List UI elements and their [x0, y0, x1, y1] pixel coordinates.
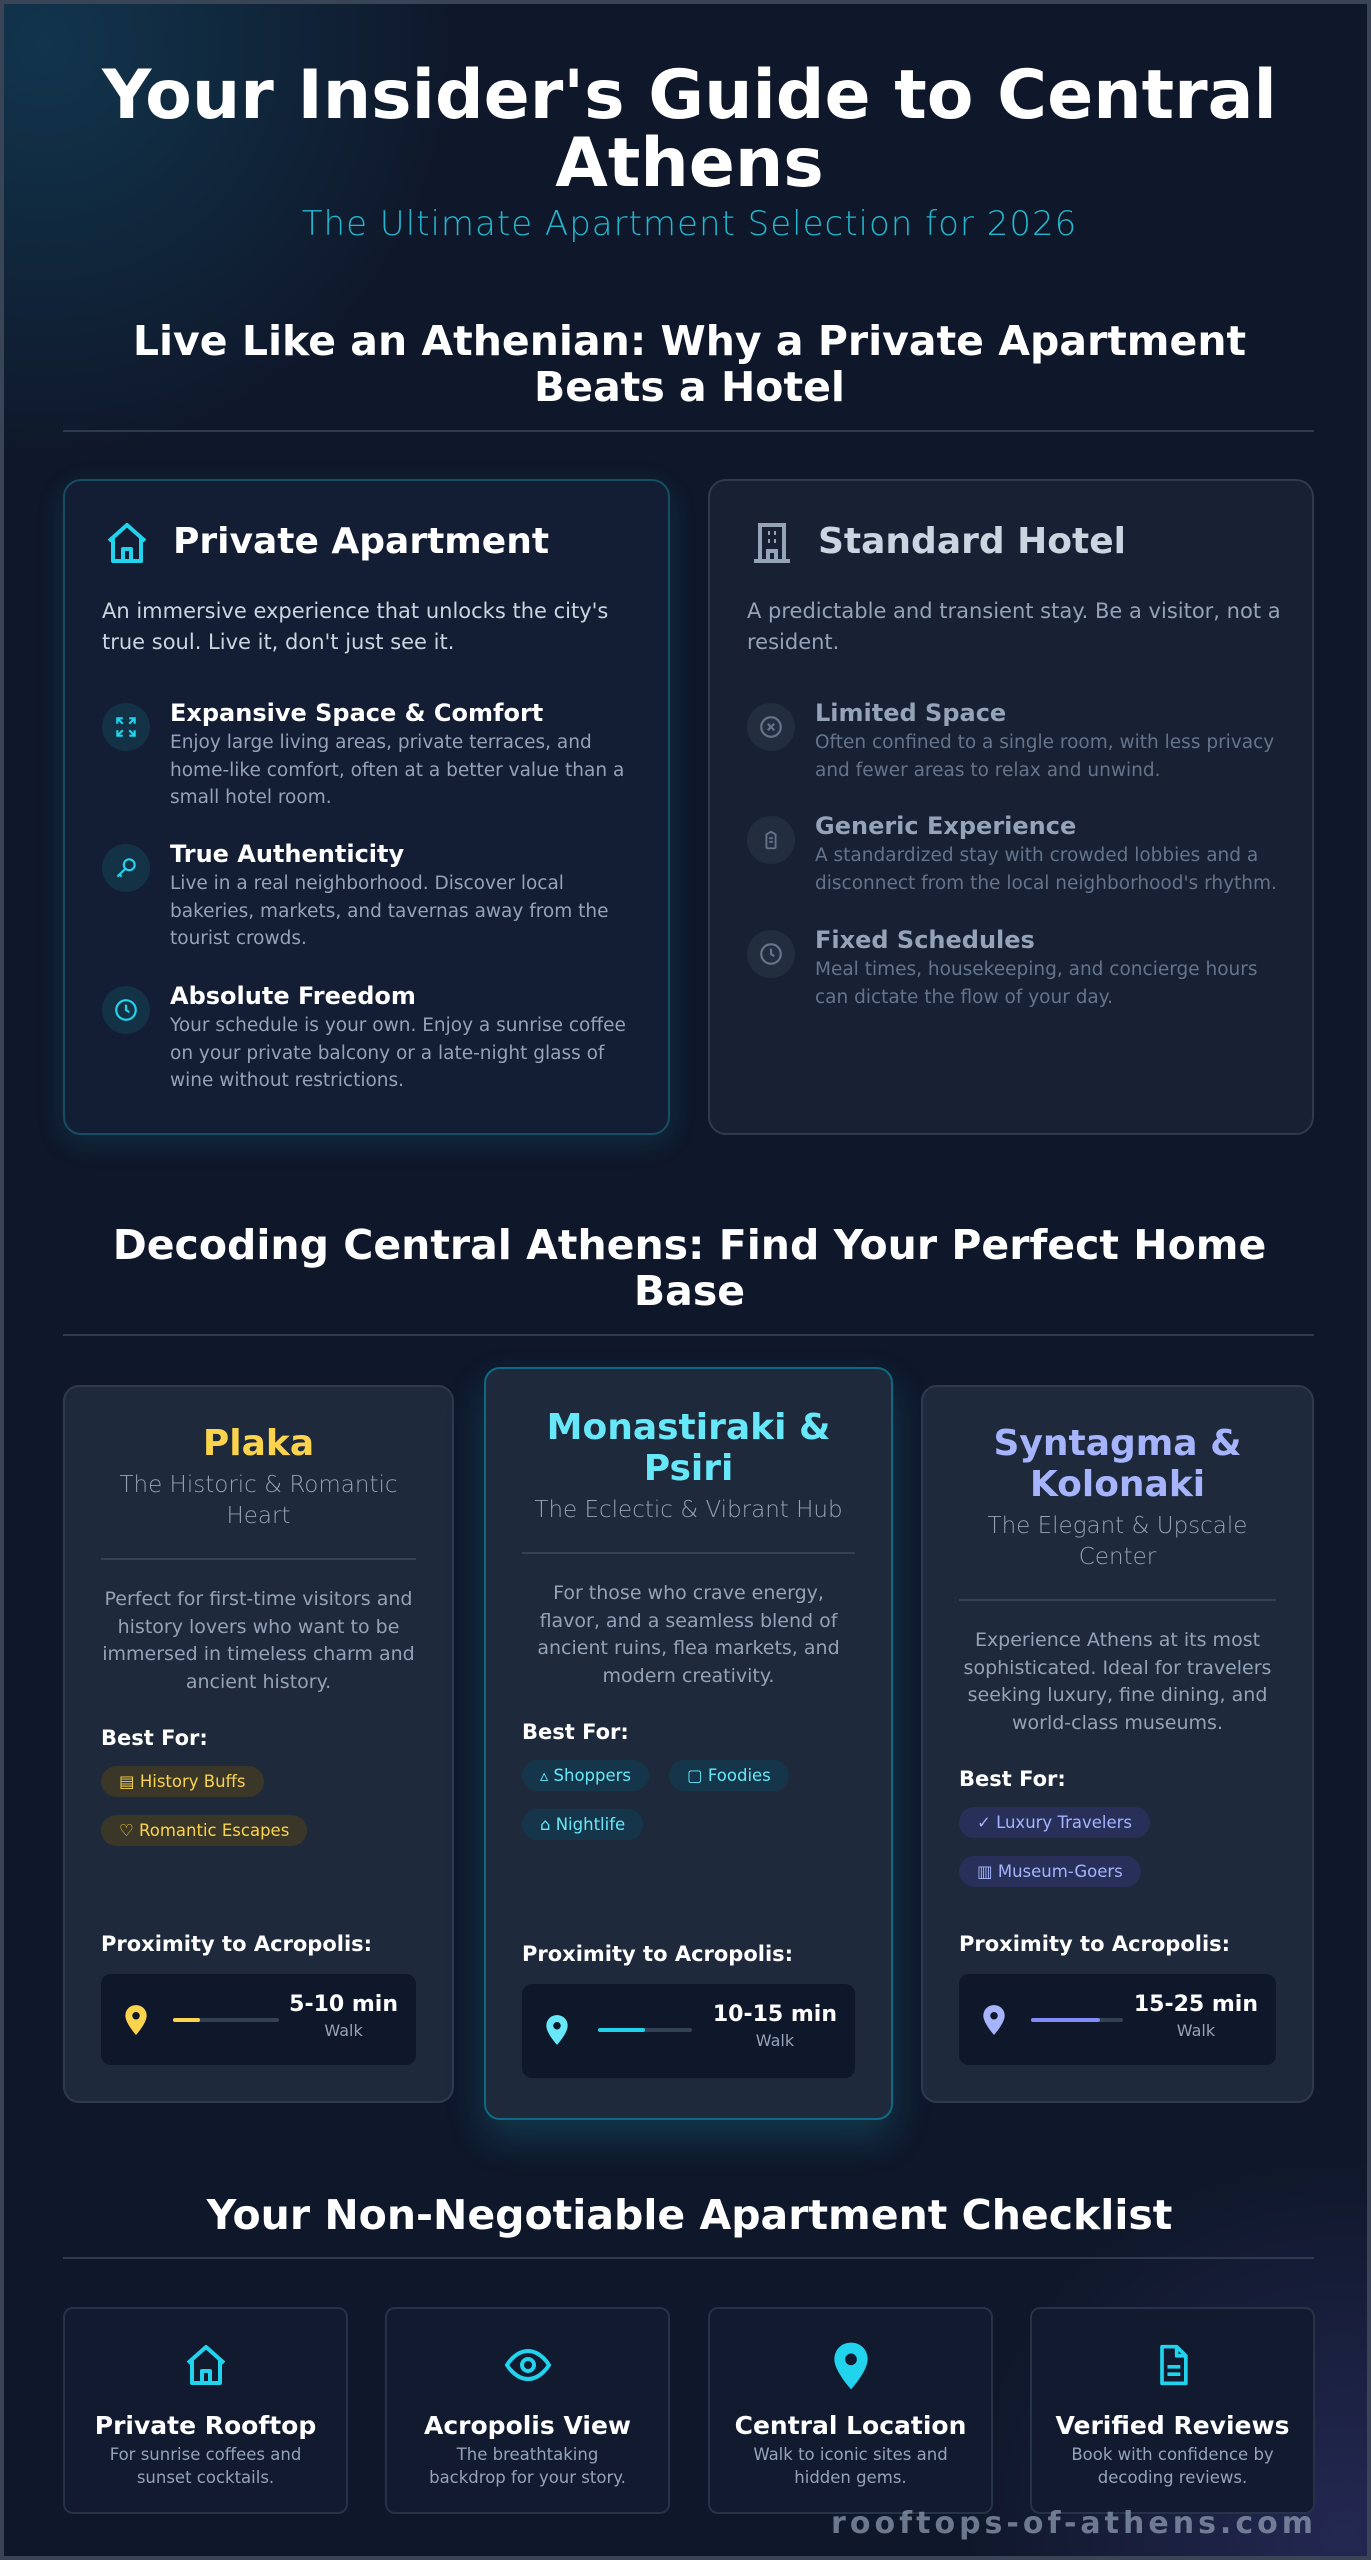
item: fixed schedules [747, 926, 1258, 1008]
panel: standard hotel [708, 479, 1314, 1135]
panel: private apartment: Your schedule is your own. Enjoy a sunrise coffee on your private balcony or a late-night glass of wine without restrictions. [170, 1015, 626, 1091]
icon: house [108, 522, 146, 563]
checklist: location: Central Location [735, 2411, 966, 2440]
checklist: view [385, 2307, 670, 2514]
panel: plaka: 5-10 min [289, 1992, 398, 2017]
checklist: reviews: Book with confidence by decoding reviews. [1071, 2445, 1274, 2487]
heading: Standard Hotel [818, 521, 1126, 562]
panel: standard hotel: Meal times, housekeeping, and concierge hours can dictate the flow of your day. [815, 959, 1258, 1008]
item: generic [747, 812, 1277, 894]
checklist: rooftop: For sunrise coffees and sunset cocktails. [110, 2445, 301, 2487]
checklist: rooftop [63, 2307, 348, 2514]
checklist: location: Walk to iconic sites and hidden gems. [753, 2445, 948, 2487]
checklist: location [708, 2307, 993, 2514]
name: Plaka [203, 1423, 314, 1464]
panel: private apartment: True Authenticity [170, 840, 404, 868]
panel: monastiraki: ▵ Shoppers [540, 1766, 631, 1785]
item: authenticity [102, 840, 608, 949]
panel: monastiraki: 10-15 min [713, 2002, 837, 2027]
panel: syntagma: ✓ Luxury Travelers [977, 1813, 1132, 1832]
title: Your Insider's Guide to Central Athens [102, 56, 1277, 203]
item: space [102, 699, 624, 808]
icon: house [186, 2344, 226, 2385]
panel: syntagma: Walk [1177, 2021, 1215, 2040]
tagline: The Historic & Romantic Heart [119, 1472, 398, 1529]
panel: monastiraki: Walk [756, 2031, 794, 2050]
description: An immersive experience that unlocks the city's true soul. Live it, don't just see it. [102, 599, 608, 654]
name: Monastiraki & Psiri [547, 1407, 830, 1489]
panel: syntagma: 15-25 min [1134, 1992, 1258, 2017]
checklist: reviews [1030, 2307, 1315, 2514]
checklist: rooftop: Private Rooftop [95, 2411, 316, 2440]
tagline: The Eclectic & Vibrant Hub [534, 1497, 843, 1523]
description: For those who crave energy, flavor, and a seamless blend of ancient ruins, flea markets, and modern creativity. [537, 1582, 840, 1686]
panel: plaka: ♡ Romantic Escapes [119, 1821, 289, 1840]
panel: private apartment [63, 479, 670, 1135]
item: freedom [102, 982, 626, 1091]
panel: syntagma [921, 1385, 1314, 2103]
subtitle: The Ultimate Apartment Selection for 2026 [302, 204, 1077, 244]
best for: Best For: [959, 1767, 1066, 1791]
panel: private apartment: Absolute Freedom [170, 982, 416, 1010]
checklist: reviews: Verified Reviews [1056, 2411, 1289, 2440]
panel: syntagma: ▥ Museum-Goers [977, 1862, 1123, 1881]
section heading: checklist: Your Non-Negotiable Apartment Checklist [207, 2191, 1172, 2239]
best for: Best For: [522, 1720, 629, 1744]
best for: Best For: [101, 1726, 208, 1750]
panel: standard hotel: Often confined to a single room, with less privacy and fewer areas to relax and unwind. [815, 732, 1274, 780]
icon: building [754, 523, 790, 563]
description: A predictable and transient stay. Be a visitor, not a resident. [747, 599, 1281, 654]
item: limited space [747, 699, 1274, 780]
panel: standard hotel: A standardized stay with crowded lobbies and a disconnect from the local neighborhood's rhythm. [815, 845, 1277, 894]
proximity: Proximity to Acropolis: [522, 1942, 793, 1966]
icon: eye [504, 2349, 552, 2381]
icon: pin [834, 2342, 868, 2390]
panel: private apartment: Live in a real neighborhood. Discover local bakeries, markets, and tavernas away from the tourist crowds. [170, 873, 608, 949]
checklist: view: Acropolis View [424, 2411, 631, 2440]
panel: plaka [63, 1385, 454, 2103]
description: Perfect for first-time visitors and history lovers who want to be immersed in timeless charm and ancient history. [102, 1588, 415, 1692]
proximity: Proximity to Acropolis: [101, 1932, 372, 1956]
section heading: apartment vs hotel: Live Like an Athenian: Why a Private Apartment Beats a Hotel [133, 317, 1246, 411]
panel: plaka: Walk [324, 2021, 363, 2040]
panel: standard hotel: Generic Experience [815, 812, 1076, 840]
panel: monastiraki: ▢ Foodies [687, 1766, 771, 1785]
panel: private apartment: Enjoy large living areas, private terraces, and home-like comfort, often at a better value than a small hotel room. [170, 732, 624, 808]
panel: monastiraki [484, 1367, 893, 2120]
section heading: neighborhoods: Decoding Central Athens: Find Your Perfect Home Base [113, 1221, 1266, 1315]
description: Experience Athens at its most sophisticated. Ideal for travelers seeking luxury, fine dining, and world-class museums. [964, 1629, 1271, 1734]
heading: Private Apartment [173, 521, 549, 562]
name: Syntagma & Kolonaki [993, 1423, 1242, 1505]
panel: monastiraki: ⌂ Nightlife [540, 1815, 625, 1834]
panel: standard hotel: Limited Space [815, 699, 1006, 727]
panel: standard hotel: Fixed Schedules [815, 926, 1035, 954]
panel: plaka: ▤ History Buffs [119, 1772, 246, 1791]
proximity: Proximity to Acropolis: [959, 1932, 1230, 1956]
tagline: The Elegant & Upscale Center [988, 1513, 1247, 1570]
icon: document [1160, 2344, 1188, 2386]
checklist: view: The breathtaking backdrop for your story. [429, 2445, 626, 2487]
panel: private apartment: Expansive Space & Comfort [170, 699, 543, 727]
watermark: rooftops-of-athens.com [831, 2506, 1317, 2541]
